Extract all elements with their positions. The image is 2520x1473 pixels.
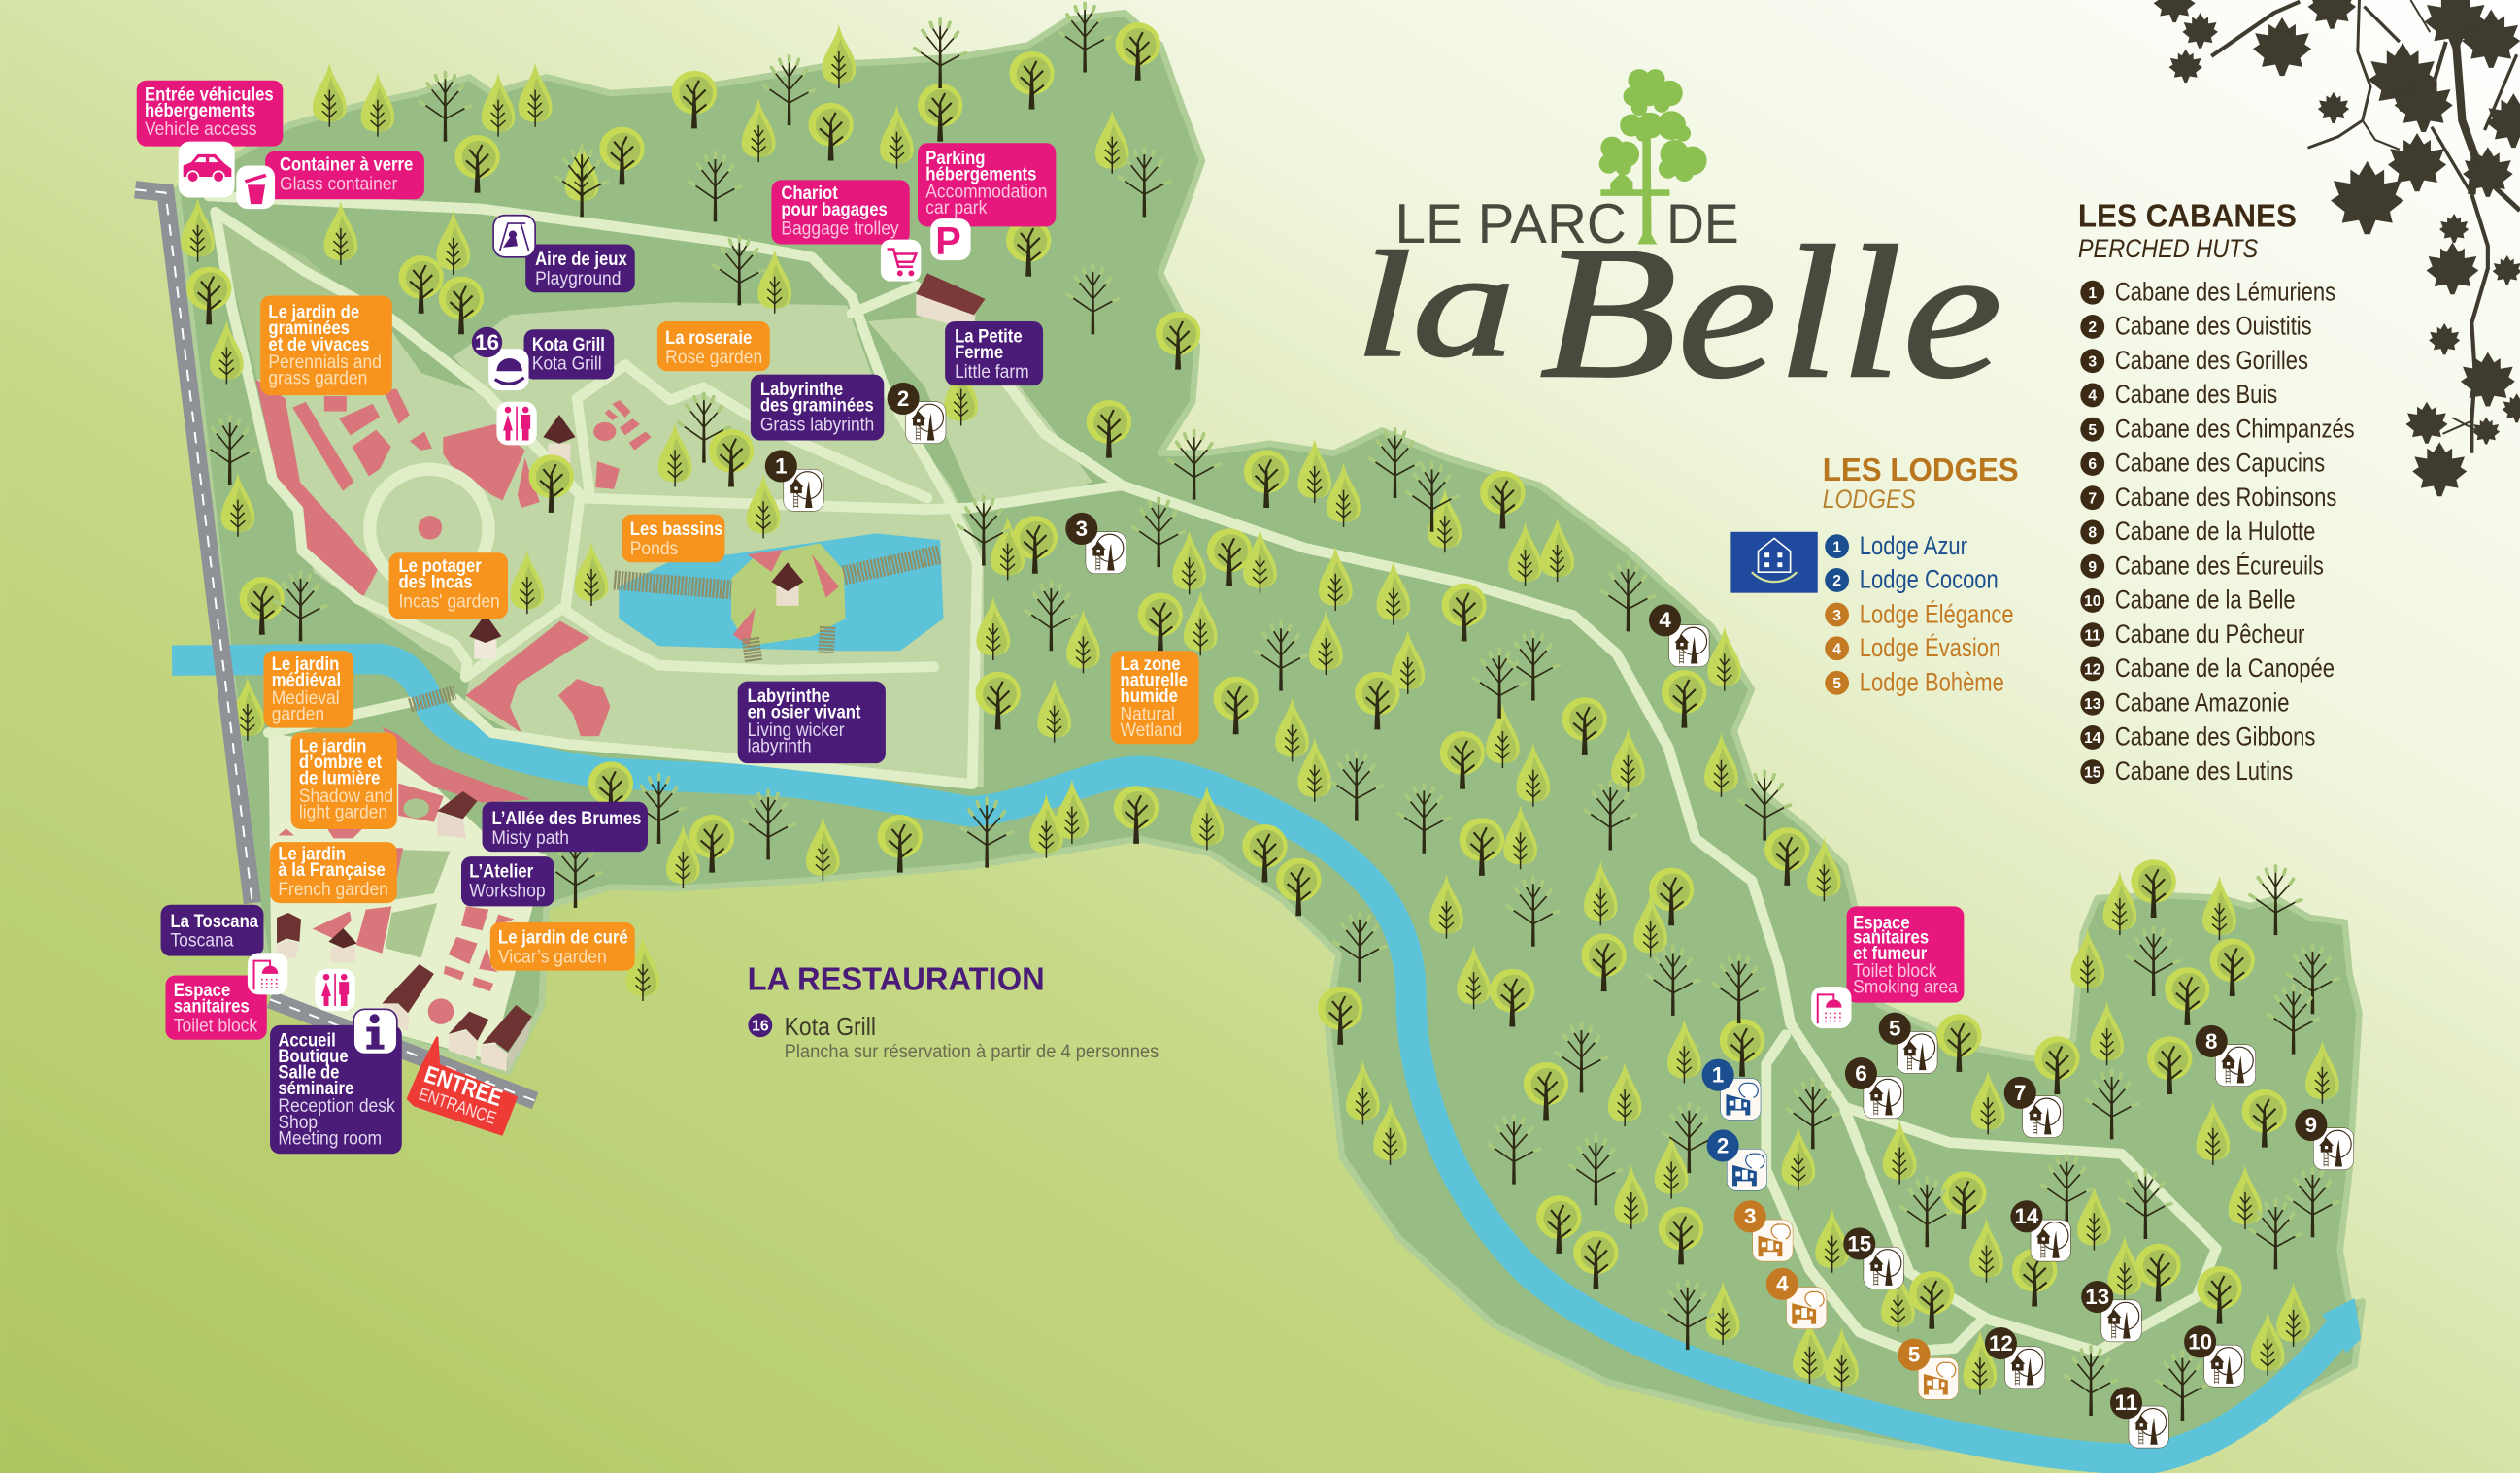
legend: cabanes list: 6 xyxy=(2088,456,2097,473)
label: shadow and light garden: light garden xyxy=(299,801,387,822)
label: incas garden: Le potager xyxy=(398,555,482,576)
label: french garden xyxy=(270,842,397,903)
label: shadow and light garden: Le jardin xyxy=(299,735,366,756)
mid green zone xyxy=(216,212,390,380)
label: toilet and smoking area: Toilet block xyxy=(1853,959,1937,981)
label: toilet and smoking area: sanitaires xyxy=(1853,926,1929,948)
icon: trolley xyxy=(881,240,921,282)
legend: lodges list: Lodge Élégance xyxy=(1860,600,2014,629)
pink flower beds xyxy=(255,380,652,1024)
legend: cabanes list: 8 xyxy=(2088,525,2097,542)
label: wetland: humide xyxy=(1121,686,1178,706)
label: baggage trolley: Chariot xyxy=(781,183,838,203)
legend: cabanes list: Cabane des Gorilles xyxy=(2115,347,2308,375)
label: vicar's garden: Vicar’s garden xyxy=(498,946,607,966)
restauration entry xyxy=(748,1013,1159,1062)
label: accommodation car park: Accommodation xyxy=(925,181,1047,202)
entrance tag xyxy=(408,1037,517,1134)
label: toilet block xyxy=(165,976,267,1040)
label: incas garden: Incas' garden xyxy=(398,590,500,612)
legend: cabanes list: Cabane de la Hulotte xyxy=(2115,518,2315,547)
label: workshop xyxy=(461,856,554,906)
restauration entry: Plancha sur réservation à partir de 4 personnes xyxy=(785,1041,1159,1062)
marker: lodge 3 xyxy=(1734,1200,1793,1261)
icon: toilets upper xyxy=(496,402,537,445)
label: medieval garden xyxy=(263,651,353,728)
marker: lodge 2 xyxy=(1707,1129,1767,1190)
label: toilet and smoking area: Smoking area xyxy=(1853,976,1959,997)
label: grass labyrinth xyxy=(751,375,884,440)
pale lawn near the entrance xyxy=(268,733,547,1060)
label: wetland: Wetland xyxy=(1121,719,1182,740)
label: wetland: naturelle xyxy=(1121,670,1188,690)
label: medieval garden: Medieval xyxy=(272,686,340,708)
label: playground: Aire de jeux xyxy=(535,249,627,269)
legend: cabanes list: 10 xyxy=(2084,593,2101,610)
title: le parc: LE PARC xyxy=(1395,193,1627,255)
label: french garden: Le jardin xyxy=(278,843,346,864)
legend: cabanes list: 4 xyxy=(2088,388,2097,405)
label: reception: Reception desk xyxy=(278,1094,395,1116)
title: de: DE xyxy=(1666,193,1739,255)
paths xyxy=(209,196,2216,1352)
marker: cabane 7 xyxy=(2004,1077,2063,1138)
label: medieval garden: garden xyxy=(272,703,324,724)
icon: parking: P xyxy=(935,219,961,262)
label: vicar's garden xyxy=(490,922,635,971)
label: workshop: Workshop xyxy=(469,880,546,901)
label: shadow and light garden: Shadow and xyxy=(299,785,393,806)
marker: lodge 5 xyxy=(1898,1339,1959,1399)
label: ponds: Les bassins xyxy=(630,519,722,539)
label: reception: Accueil xyxy=(278,1029,336,1051)
label: kota grill: Kota Grill xyxy=(532,334,605,354)
legend: cabanes list: 3 xyxy=(2088,353,2097,370)
legend: lodges list: Lodge Cocoon xyxy=(1860,566,1999,594)
legend: cabanes list: Cabane Amazonie xyxy=(2115,689,2290,718)
icon: swing xyxy=(493,216,535,257)
label: accommodation car park: Parking xyxy=(925,148,986,168)
icon: info xyxy=(353,1009,397,1055)
legend: cabanes list: Cabane de la Canopée xyxy=(2115,654,2335,684)
label: toscana xyxy=(161,905,263,956)
label: vicar's garden: Le jardin de curé xyxy=(498,926,628,948)
label: ponds: Ponds xyxy=(630,537,678,558)
marker: cabane 12: 12 xyxy=(1989,1331,2013,1356)
marker: lodge 4: 4 xyxy=(1776,1272,1789,1296)
label: accommodation car park xyxy=(918,143,1056,226)
legend: cabanes list: Cabane du Pêcheur xyxy=(2115,620,2304,649)
label: reception: séminaire xyxy=(278,1078,353,1098)
label: perennials garden: Le jardin de xyxy=(268,302,359,322)
label: vehicle access: Vehicle access xyxy=(145,117,256,139)
label: wicker labyrinth: Living wicker xyxy=(748,719,845,740)
label: toilet block: Toilet block xyxy=(174,1015,258,1036)
legend: cabanes list: 12 xyxy=(2084,662,2101,679)
legend: lodges list: 5 xyxy=(1832,676,1841,692)
marker: cabane 6: 6 xyxy=(1855,1061,1867,1086)
legend: cabanes subheading: PERCHED HUTS xyxy=(2078,234,2258,263)
title: belle: Belle xyxy=(1539,208,2002,418)
icon: accessibility logo xyxy=(1730,532,1818,593)
oval lawn xyxy=(403,798,429,818)
label: glass container xyxy=(265,151,424,199)
icon: shower xyxy=(248,953,287,994)
legend: cabanes list: 7 xyxy=(2088,490,2097,507)
title: la: la xyxy=(1355,220,1516,388)
label: toilet and smoking area: et fumeur xyxy=(1853,943,1927,963)
trees: round xyxy=(186,22,2287,1329)
legend: cabanes list: Cabane des Ouistitis xyxy=(2115,313,2312,341)
marker: lodge 3: 3 xyxy=(1744,1204,1756,1228)
ring path xyxy=(370,469,488,588)
legend: cabanes list: 15 xyxy=(2084,764,2101,781)
bridges xyxy=(410,554,940,706)
label: little farm: Little farm xyxy=(955,360,1029,382)
label: shadow and light garden: de lumière xyxy=(299,768,380,788)
marker: cabane 13: 13 xyxy=(2085,1285,2109,1309)
restauration entry: Kota Grill xyxy=(785,1014,876,1041)
legend: cabanes list: 9 xyxy=(2088,559,2097,576)
label: incas garden xyxy=(389,552,508,619)
marker: cabane 7: 7 xyxy=(2014,1081,2026,1105)
label: incas garden: des Incas xyxy=(398,572,473,592)
legend: cabanes list: Cabane des Buis xyxy=(2115,381,2277,410)
marker: lodge 4 xyxy=(1766,1268,1827,1329)
label: perennials garden: Perennials and xyxy=(268,351,382,372)
label: misty path: Misty path xyxy=(491,826,569,848)
label: reception: Shop xyxy=(278,1111,318,1132)
marker: cabane 5: 5 xyxy=(1889,1017,1900,1041)
legend: lodges heading: LES LODGES xyxy=(1823,452,2019,488)
legend: cabanes list: 11 xyxy=(2084,627,2100,644)
legend: lodges list: 4 xyxy=(1832,642,1841,658)
label: french garden: French garden xyxy=(278,878,388,899)
entrance tag: ENTRÉE xyxy=(420,1060,506,1112)
legend: lodges list: Lodge Azur xyxy=(1860,532,1967,560)
marker: cabane 3 xyxy=(1065,513,1126,574)
label: little farm: Ferme xyxy=(955,342,1003,362)
label: rose garden: La roseraie xyxy=(665,327,752,348)
icon: bin xyxy=(236,165,275,209)
label: wicker labyrinth: labyrinth xyxy=(748,735,812,756)
label: rose garden: Rose garden xyxy=(665,346,762,367)
label: baggage trolley: Baggage trolley xyxy=(781,218,899,239)
label: wicker labyrinth: Labyrinthe xyxy=(748,686,830,706)
label: baggage trolley xyxy=(771,180,910,245)
legend: cabanes list xyxy=(2080,279,2355,786)
label: vehicle access xyxy=(137,81,283,147)
icon: parking xyxy=(930,218,971,262)
label: perennials garden: et de vivaces xyxy=(268,334,369,354)
marker: cabane 2 xyxy=(888,383,946,444)
icon: car xyxy=(179,142,235,198)
label: french garden: à la Française xyxy=(278,859,386,880)
marker: cabane 1: 1 xyxy=(775,453,788,478)
label: reception xyxy=(270,1025,402,1154)
legend: cabanes list: 1 xyxy=(2088,285,2097,302)
label: rose garden xyxy=(657,321,770,371)
label: toscana: La Toscana xyxy=(170,911,259,931)
label: toscana: Toscana xyxy=(170,929,234,951)
label: misty path: L’Allée des Brumes xyxy=(491,808,641,828)
marker: 16 xyxy=(472,327,502,357)
marker: cabane 8 xyxy=(2196,1025,2256,1087)
light garden zones xyxy=(257,302,1092,787)
label: perennials garden xyxy=(260,296,392,395)
label: little farm xyxy=(945,321,1043,385)
label: ponds xyxy=(622,515,724,562)
label: reception: Salle de xyxy=(278,1061,339,1083)
legend: cabanes list: Cabane de la Belle xyxy=(2115,586,2296,615)
branches and leaves top right xyxy=(2154,0,2520,496)
marker: cabane 9: 9 xyxy=(2305,1113,2317,1137)
label: glass container: Glass container xyxy=(280,172,397,193)
label: grass labyrinth: Grass labyrinth xyxy=(760,414,874,435)
legend: cabanes list: Cabane des Écureuils xyxy=(2115,552,2324,581)
marker: lodge 1: 1 xyxy=(1712,1063,1724,1088)
label: playground: Playground xyxy=(535,267,621,288)
label: grass labyrinth: des graminées xyxy=(760,395,874,416)
label: kota grill: Kota Grill xyxy=(532,352,602,374)
marker: cabane 14 xyxy=(2010,1200,2070,1261)
restauration heading: LA RESTAURATION xyxy=(748,961,1045,997)
label: vehicle access: Entrée véhicules xyxy=(145,84,274,105)
marker: cabane 15 xyxy=(1843,1227,1903,1289)
label: accommodation car park: car park xyxy=(925,196,988,218)
label: perennials garden: grass garden xyxy=(268,367,367,388)
legend: lodges list: Lodge Bohème xyxy=(1860,669,2004,697)
entrance tag: ENTRANCE xyxy=(417,1084,499,1128)
road xyxy=(135,189,535,1101)
label: shadow and light garden xyxy=(291,733,397,829)
marker: 16: 16 xyxy=(475,330,499,354)
label: vehicle access: hébergements xyxy=(145,100,255,120)
legend: cabanes list: 14 xyxy=(2084,730,2101,747)
marker: lodge 5: 5 xyxy=(1908,1343,1920,1367)
legend: cabanes list: 2 xyxy=(2088,319,2097,336)
label: medieval garden: Le jardin xyxy=(272,653,339,674)
marker: cabane 14: 14 xyxy=(2014,1204,2039,1228)
marker: cabane 3: 3 xyxy=(1076,517,1088,541)
label: workshop: L’Atelier xyxy=(469,861,533,882)
label: wicker labyrinth xyxy=(738,682,886,763)
label: glass container: Container à verre xyxy=(280,153,413,175)
icon: cloche xyxy=(488,349,529,390)
label: grass labyrinth: Labyrinthe xyxy=(760,379,843,399)
marker: lodge 1 xyxy=(1702,1059,1761,1120)
legend: cabanes list: Cabane des Robinsons xyxy=(2115,484,2336,512)
label: misty path xyxy=(483,802,648,852)
label: little farm: La Petite xyxy=(955,325,1023,347)
label: reception: Meeting room xyxy=(278,1127,382,1148)
label: toilet and smoking area: Espace xyxy=(1853,912,1910,933)
label: medieval garden: médiéval xyxy=(272,670,341,690)
legend: cabanes list: Cabane des Lutins xyxy=(2115,757,2293,786)
marker: cabane 15: 15 xyxy=(1847,1231,1871,1255)
label: playground xyxy=(525,245,635,292)
legend: cabanes list: Cabane des Capucins xyxy=(2115,450,2325,478)
marker: cabane 8: 8 xyxy=(2205,1029,2217,1054)
label: wetland: La zone xyxy=(1121,653,1181,674)
marker: cabane 4: 4 xyxy=(1659,608,1671,632)
label: toilet block: Espace xyxy=(174,980,230,1000)
legend: lodges list xyxy=(1825,532,2014,697)
marker: cabane 2: 2 xyxy=(897,386,909,411)
marker: cabane 4 xyxy=(1649,604,1709,667)
icon: toilets lower xyxy=(315,969,355,1011)
legend: cabanes list: Cabane des Lémuriens xyxy=(2115,279,2335,307)
label: wetland: Natural xyxy=(1121,703,1175,724)
label: baggage trolley: pour bagages xyxy=(781,199,888,219)
legend: cabanes list: Cabane des Gibbons xyxy=(2115,723,2315,752)
huts and buildings xyxy=(277,273,986,1071)
river xyxy=(172,659,2338,1459)
label: kota grill xyxy=(524,329,614,380)
marker: cabane 9 xyxy=(2295,1109,2354,1170)
legend: cabanes heading: LES CABANES xyxy=(2078,198,2297,234)
legend: cabanes list: Cabane des Chimpanzés xyxy=(2115,416,2355,444)
marker: cabane 1 xyxy=(765,450,823,511)
trees: pointed xyxy=(181,24,2339,1394)
marker: cabane 11: 11 xyxy=(2115,1390,2137,1415)
legend: cabanes list: 13 xyxy=(2084,696,2101,713)
label: toilet and smoking area xyxy=(1847,906,1964,1003)
marker: cabane 10: 10 xyxy=(2188,1329,2212,1354)
label: wicker labyrinth: en osier vivant xyxy=(748,702,860,722)
label: shadow and light garden: d’ombre et xyxy=(299,752,382,772)
green lawns lower garden xyxy=(386,850,450,957)
legend: lodges list: 2 xyxy=(1832,573,1841,589)
marker: cabane 5 xyxy=(1879,1013,1937,1073)
title: tree logo xyxy=(1599,69,1707,245)
pond xyxy=(619,533,943,651)
label: toilet block: sanitaires xyxy=(174,996,250,1017)
marker: lodge 2: 2 xyxy=(1717,1133,1729,1157)
river end xyxy=(2322,1298,2361,1353)
restauration entry: 16 xyxy=(752,1019,769,1035)
marker: cabane 11 xyxy=(2110,1387,2168,1448)
marker: cabane 10 xyxy=(2184,1325,2244,1387)
legend: cabanes list: 5 xyxy=(2088,422,2097,439)
label: perennials garden: graminées xyxy=(268,318,350,338)
legend: lodges subheading: LODGES xyxy=(1823,485,1916,514)
marker: cabane 6 xyxy=(1845,1057,1903,1119)
label: accommodation car park: hébergements xyxy=(925,163,1036,184)
legend: lodges list: 3 xyxy=(1832,608,1841,624)
marker: cabane 13 xyxy=(2081,1281,2141,1342)
icon: shower east xyxy=(1811,987,1852,1028)
label: wetland xyxy=(1111,651,1199,744)
marker: cabane 12 xyxy=(1985,1327,2045,1389)
legend: lodges list: 1 xyxy=(1832,539,1841,555)
label: reception: Boutique xyxy=(278,1046,349,1066)
legend: lodges list: Lodge Évasion xyxy=(1860,634,2000,663)
